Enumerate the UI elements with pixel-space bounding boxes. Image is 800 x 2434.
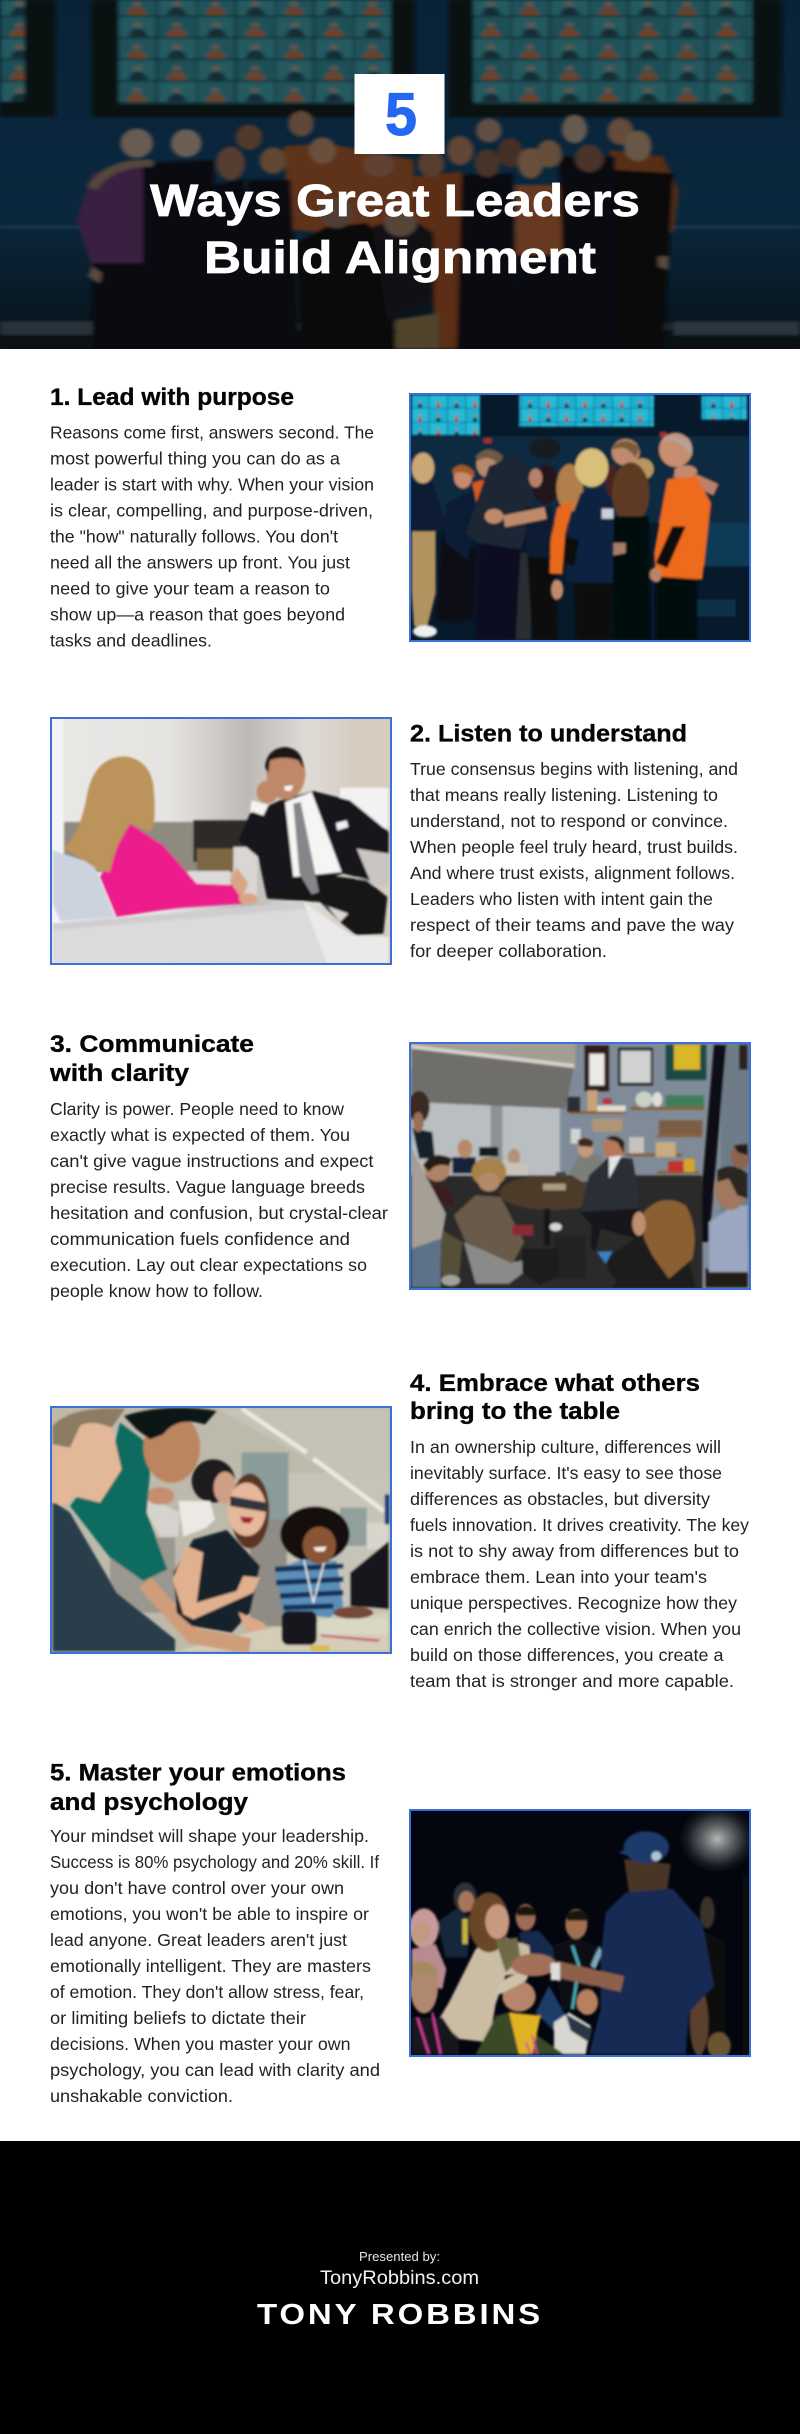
text block 4: team that is stronger and more capable. xyxy=(410,1671,734,1691)
hero photo: team on stage in front of video wall xyxy=(0,0,800,634)
text block 1: show up—a reason that goes beyond xyxy=(50,604,345,624)
desk items xyxy=(318,1619,388,1634)
text block 1 xyxy=(50,422,374,650)
text block 5: unshakable conviction. xyxy=(50,2086,233,2106)
front row xyxy=(410,1961,438,2013)
back woman xyxy=(192,1459,235,1503)
white number box xyxy=(354,74,444,154)
text block 5: of emotion. They don't allow stress, fear, xyxy=(50,1982,364,2002)
text block 5: or limiting beliefs to dictate their xyxy=(50,2008,306,2028)
woman xyxy=(100,824,243,917)
panel: 5. Master your emotions and psychology xyxy=(50,1760,759,2106)
text block 1: need all the answers up front. You just xyxy=(50,552,350,572)
hero banner xyxy=(0,0,800,349)
heading 3: with clarity xyxy=(49,1060,190,1087)
panel: 4. Embrace what others bring to the table xyxy=(50,1370,749,1691)
text block 4 xyxy=(410,1437,749,1691)
text block 4: unique perspectives. Recognize how they xyxy=(410,1593,737,1613)
heading 5: 5. Master your emotions xyxy=(50,1760,346,1786)
panel: 3. Communicate with clarity xyxy=(49,1031,751,1301)
text block 1: Reasons come first, answers second. The xyxy=(50,422,374,442)
heading 3: 3. Communicate xyxy=(50,1031,254,1058)
audience back row xyxy=(437,1909,472,1957)
heading 1: 1. Lead with purpose xyxy=(50,384,294,411)
table and stand xyxy=(500,1175,605,1210)
text block 3 xyxy=(50,1099,388,1301)
heading 4: 4. Embrace what others xyxy=(410,1370,700,1397)
people xyxy=(412,531,436,626)
text block 2: And where trust exists, alignment follows. xyxy=(410,863,735,883)
text block 2: Leaders who listen with intent gain the xyxy=(410,889,713,909)
text block 3: exactly what is expected of them. You xyxy=(50,1125,350,1145)
footer xyxy=(0,2141,800,2434)
photo 5: speaker addressing the audience xyxy=(409,1809,751,2057)
text block 5: you don't have control over your own xyxy=(50,1878,344,1898)
text block 2: understand, not to respond or convince. xyxy=(410,811,728,831)
text block 4: differences as obstacles, but diversity xyxy=(410,1489,710,1509)
text block 3: precise results. Vague language breeds xyxy=(50,1177,365,1197)
front sofa xyxy=(53,902,327,964)
panel: 2. Listen to understand xyxy=(50,717,738,965)
text block 3: Clarity is power. People need to know xyxy=(50,1099,344,1119)
table xyxy=(177,1613,389,1651)
heading 5 xyxy=(50,1760,346,1816)
text block 4: can enrich the collective vision. When you xyxy=(410,1619,741,1639)
website: TonyRobbins.com xyxy=(320,2267,479,2289)
wordmark: TONY ROBBINS xyxy=(257,2299,543,2331)
text block 1: leader is start with why. When your vision xyxy=(50,474,374,494)
text block 4: fuels innovation. It drives creativity. The key xyxy=(410,1515,749,1535)
text block 1: need to give your team a reason to xyxy=(50,578,330,598)
number 5: 5 xyxy=(385,81,417,148)
photo 3: podcast meeting around a table xyxy=(409,1042,751,1290)
text block 4: build on those differences, you create a xyxy=(410,1645,724,1665)
photo 2: conversation on white sofas xyxy=(50,717,392,965)
text block 4: embrace them. Lean into your team's xyxy=(410,1567,707,1587)
heading 3 xyxy=(49,1031,254,1087)
speaker xyxy=(690,1989,708,2056)
text block 3: can't give vague instructions and expect xyxy=(50,1151,374,1171)
man xyxy=(238,791,389,897)
text block 3: communication fuels confidence and xyxy=(50,1229,350,1249)
heading 4 xyxy=(410,1370,700,1425)
title xyxy=(150,175,640,283)
text block 5: Success is 80% psychology and 20% skill. If xyxy=(50,1852,379,1872)
text block 5: Your mindset will shape your leadership. xyxy=(50,1826,369,1846)
presented by: Presented by: xyxy=(359,2249,440,2264)
heading 4: bring to the table xyxy=(410,1398,620,1425)
text block 1: tasks and deadlines. xyxy=(50,630,212,650)
text block 2: When people feel truly heard, trust builds. xyxy=(410,837,738,857)
text block 4: is not to shy away from differences but to xyxy=(410,1541,739,1561)
text block 4: In an ownership culture, differences will xyxy=(410,1437,721,1457)
photo 4: colleagues laughing at a desk xyxy=(50,1406,392,1654)
text block 5: psychology, you can lead with clarity and xyxy=(50,2060,380,2080)
text block 3: hesitation and confusion, but crystal-clear xyxy=(50,1203,388,1223)
text block 1: the "how" naturally follows. You don't xyxy=(50,526,338,546)
panel: 1. Lead with purpose xyxy=(50,384,751,650)
text block 5: decisions. When you master your own xyxy=(50,2034,350,2054)
text block 5 xyxy=(50,1826,380,2106)
text block 3: execution. Lay out clear expectations so xyxy=(50,1255,367,1275)
text block 2: respect of their teams and pave the way xyxy=(410,915,734,935)
text block 5: emotions, you won't be able to inspire or xyxy=(50,1904,369,1924)
text block 1: most powerful thing you can do as a xyxy=(50,448,340,468)
people xyxy=(569,1152,602,1182)
green man xyxy=(70,1423,167,1581)
text block 2: for deeper collaboration. xyxy=(410,941,607,961)
title: Ways Great Leaders xyxy=(150,175,640,226)
heading 5: and psychology xyxy=(50,1789,249,1816)
title: Build Alignment xyxy=(204,232,596,283)
foreground right xyxy=(606,1235,696,1287)
text block 2 xyxy=(410,759,738,961)
text block 4: inevitably surface. It's easy to see those xyxy=(410,1463,722,1483)
glasses woman xyxy=(231,1474,269,1548)
text block 5: emotionally intelligent. They are masters xyxy=(50,1956,371,1976)
text block 1: is clear, compelling, and purpose-driven, xyxy=(50,500,373,520)
text block 2: True consensus begins with listening, and xyxy=(410,759,738,779)
text block 3: people know how to follow. xyxy=(50,1281,263,1301)
heading 2: 2. Listen to understand xyxy=(410,721,687,748)
heads xyxy=(120,129,153,158)
right man xyxy=(350,1541,389,1609)
text block 2: that means really listening. Listening to xyxy=(410,785,718,805)
beige woman xyxy=(439,1934,532,2042)
text block 5: lead anyone. Great leaders aren't just xyxy=(50,1930,347,1950)
afro woman xyxy=(280,1506,350,1562)
photo 1: team embracing on stage xyxy=(409,393,751,642)
front woman xyxy=(53,1501,175,1651)
back row xyxy=(610,150,679,233)
